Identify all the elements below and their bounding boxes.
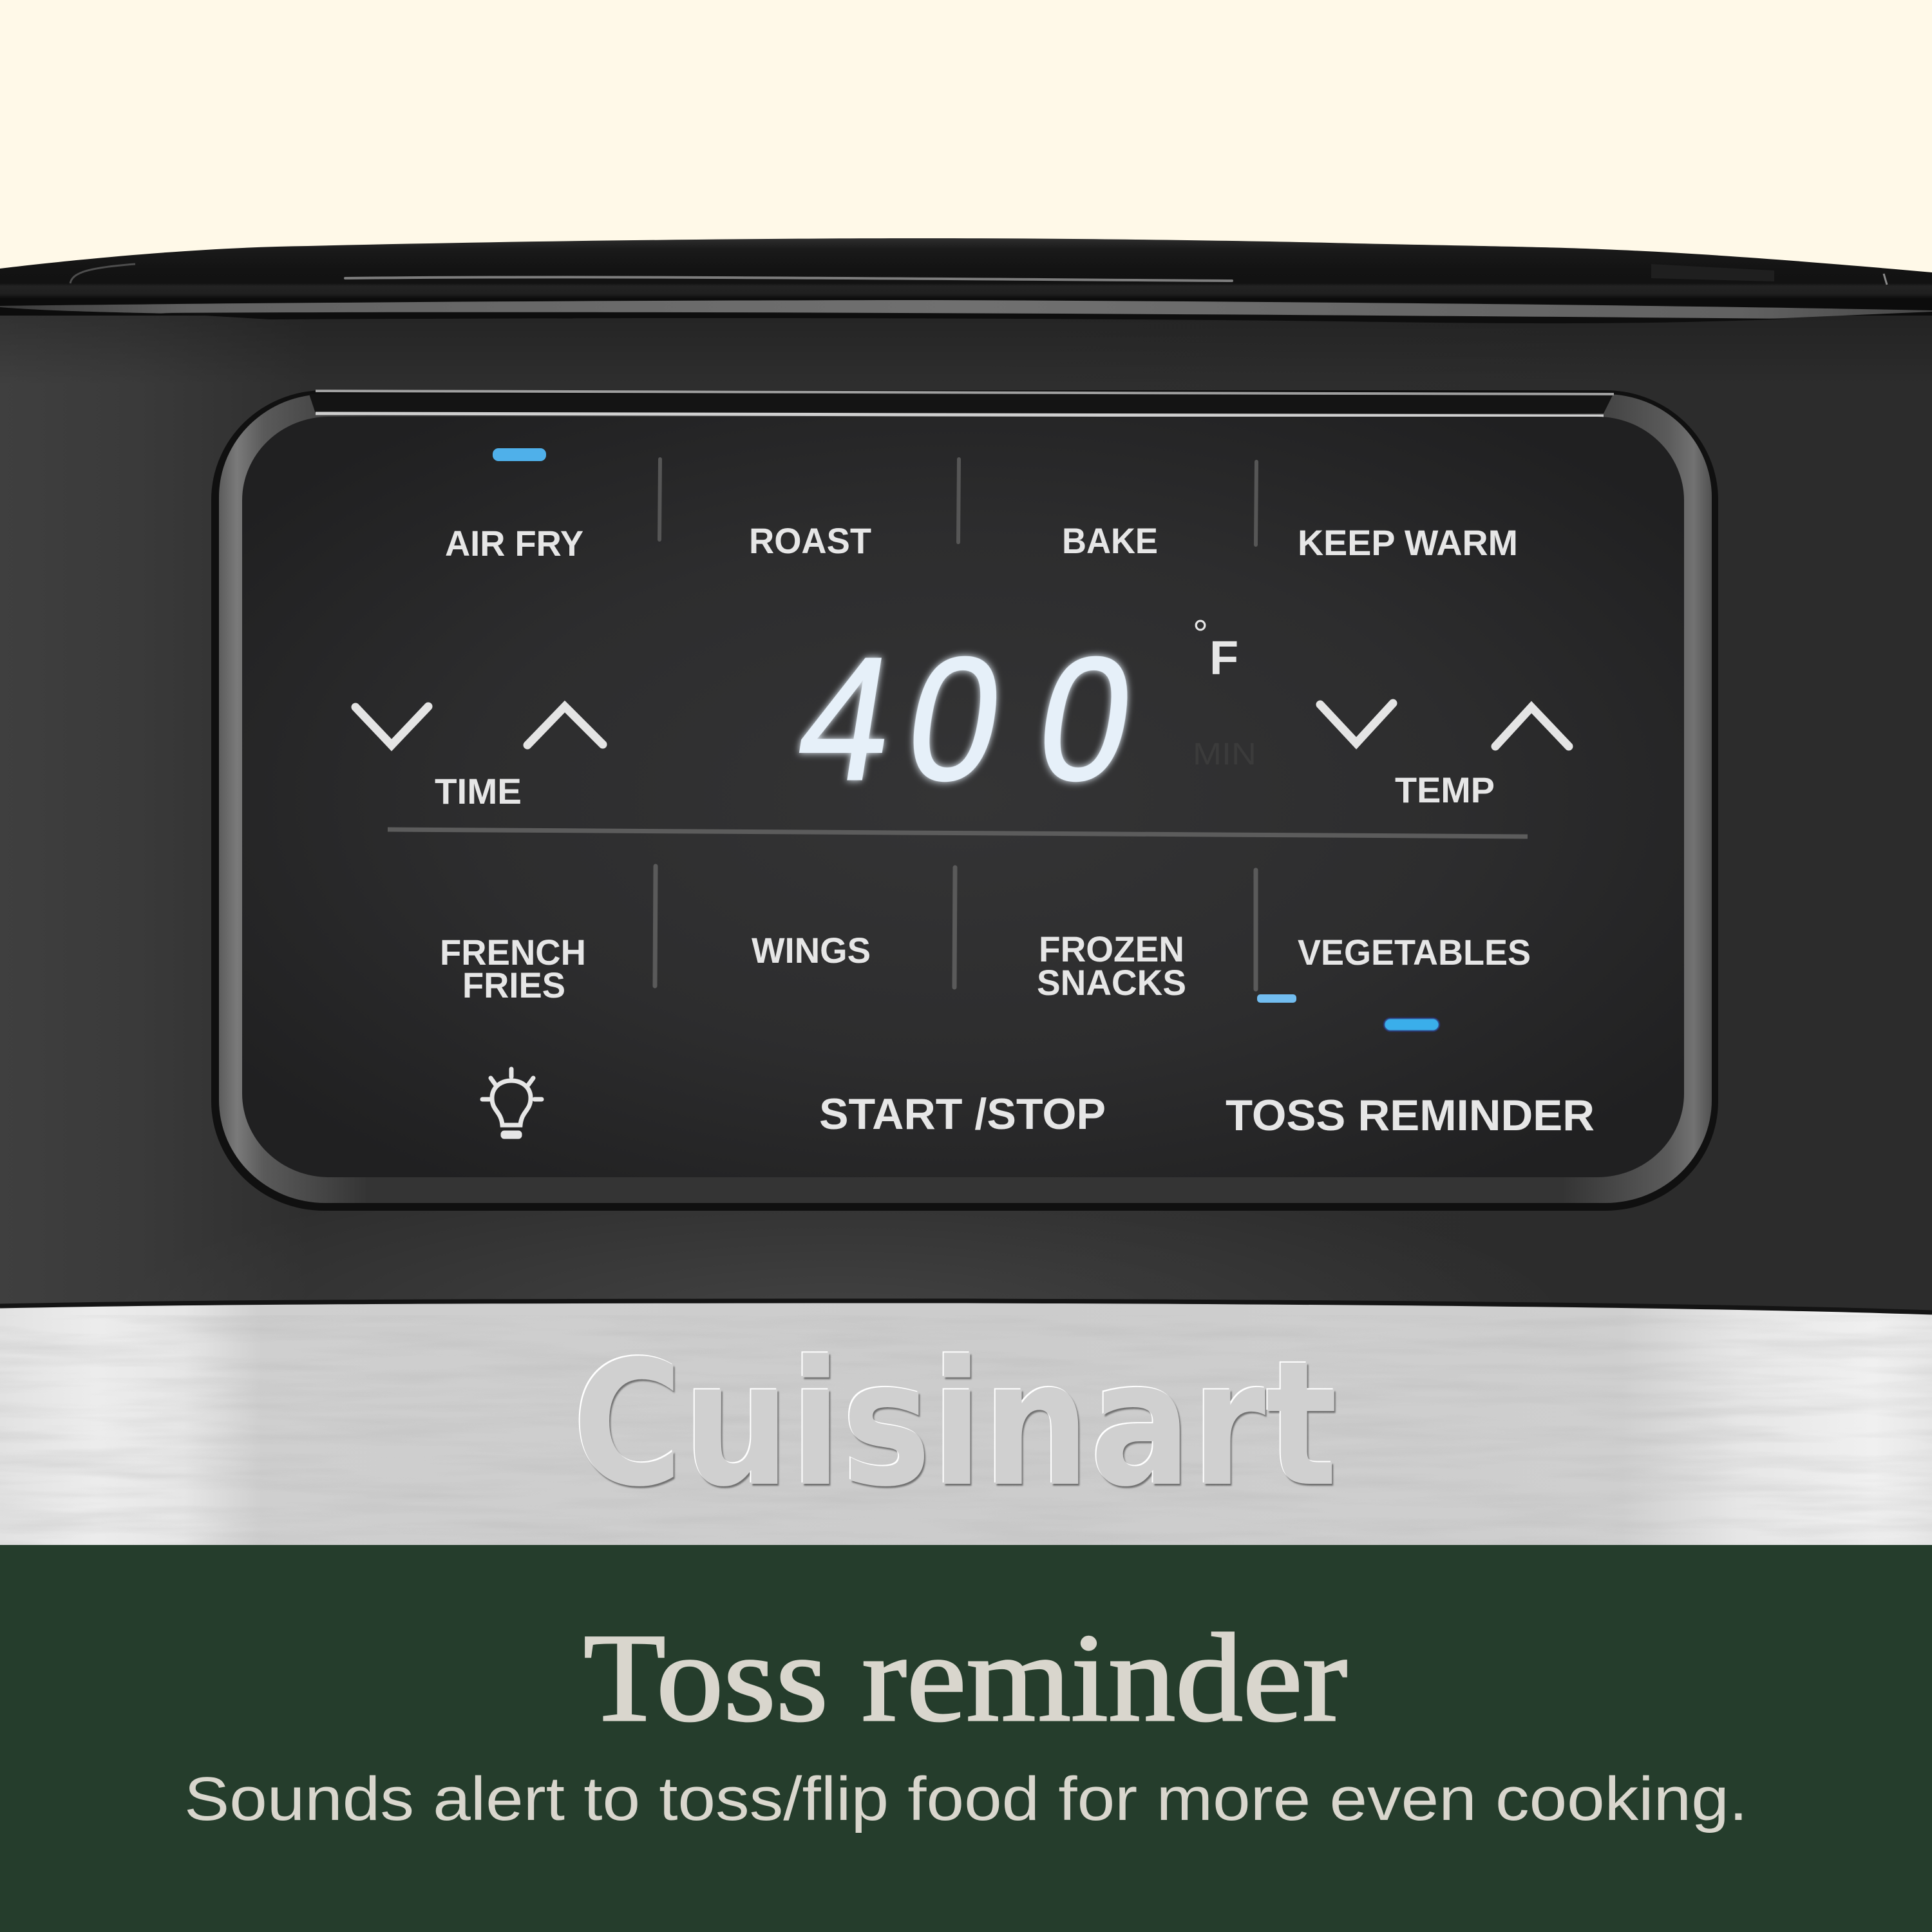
control panel bezel xyxy=(211,390,1718,1211)
top row dividers xyxy=(659,459,1256,545)
heading: Toss reminder xyxy=(583,1608,1347,1748)
label: KEEP WARM: KEEP WARM xyxy=(1298,522,1518,563)
degree symbol: ° xyxy=(1193,612,1208,656)
icon: time down arrow xyxy=(355,706,428,745)
appliance body xyxy=(0,303,1932,1333)
label: WINGS: WINGS xyxy=(752,930,871,971)
label: TEMP: TEMP xyxy=(1395,770,1495,810)
appliance lid xyxy=(0,238,1932,323)
horizontal divider xyxy=(388,829,1528,837)
label: VEGETABLES: VEGETABLES xyxy=(1298,932,1531,972)
label: TOSS REMINDER: TOSS REMINDER xyxy=(1226,1091,1595,1140)
bottom row dividers xyxy=(655,866,1256,989)
Cuisinart embossed logo: Cuisinart xyxy=(573,1324,1338,1525)
icon: temp up arrow xyxy=(1495,707,1569,746)
label: FROZEN SNACKS xyxy=(1037,929,1186,1003)
label: AIR FRY: AIR FRY xyxy=(445,523,583,564)
icon: temp down arrow xyxy=(1320,703,1393,743)
fahrenheit unit: F xyxy=(1209,631,1238,685)
control panel screen xyxy=(242,417,1684,1177)
label: FRENCH FRIES: FRENCH xyxy=(440,932,586,972)
unlit MIN label: MIN xyxy=(1193,737,1256,772)
stainless steel band xyxy=(0,1301,1932,1546)
indicator: toss reminder LED xyxy=(1384,1018,1439,1031)
label: TIME: TIME xyxy=(435,771,522,811)
icon: time up arrow xyxy=(527,706,603,745)
label: FROZEN SNACKS: FROZEN xyxy=(1039,929,1184,969)
label: START/STOP: START /STOP xyxy=(819,1090,1106,1139)
icon: light bulb xyxy=(482,1069,542,1138)
temperature readout: 400: 400 xyxy=(786,621,1146,817)
caption panel xyxy=(0,1545,1932,1932)
label: FRENCH FRIES: FRIES xyxy=(462,965,565,1005)
label: FRENCH FRIES xyxy=(440,932,586,1005)
description: Sounds alert to toss/flip food for more even cooking. xyxy=(184,1765,1748,1833)
mode indicator: air fry LED xyxy=(493,448,546,461)
indicator: vegetables LED xyxy=(1257,994,1296,1003)
label: FROZEN SNACKS: SNACKS xyxy=(1037,962,1186,1003)
label: BAKE: BAKE xyxy=(1062,520,1158,561)
label: ROAST: ROAST xyxy=(749,520,871,561)
